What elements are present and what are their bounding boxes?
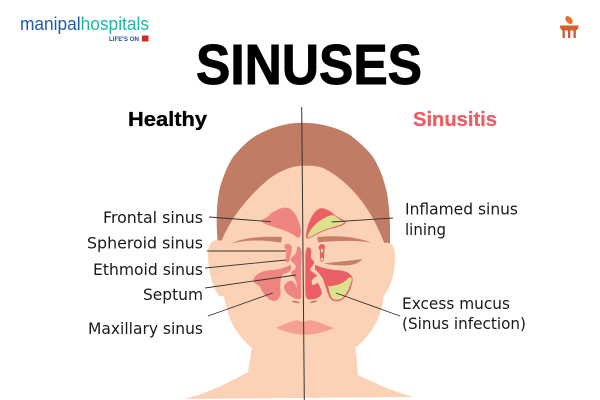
nostril right	[309, 301, 318, 303]
label: ethmoid sinus: Ethmoid sinus	[93, 260, 203, 279]
frontal mucus	[307, 215, 345, 238]
frontal sinusitis	[306, 208, 346, 238]
hair	[217, 123, 390, 246]
leader lines	[205, 217, 400, 316]
nostril left	[292, 301, 300, 303]
label: maxillary sinus: Maxillary sinus	[88, 319, 203, 338]
label: inflamed sinus lining: Inflamed sinus	[405, 200, 518, 218]
head illustration	[185, 123, 413, 399]
logo: Manipal Hospitals	[20, 14, 149, 43]
septum and turbinates healthy	[284, 247, 302, 299]
title: SINUSES	[196, 33, 422, 96]
label: excess mucus sinus infection: Excess mucus	[402, 294, 510, 313]
label: septum: Septum	[143, 285, 203, 304]
eyebrow left	[232, 237, 282, 243]
maxillary healthy	[253, 265, 291, 301]
divider line	[302, 107, 304, 400]
label: frontal sinus: Frontal sinus	[103, 208, 203, 227]
heading: sinusitis: Sinusitis	[413, 108, 497, 131]
maxillary sinusitis	[315, 265, 353, 301]
label: inflamed sinus lining	[405, 200, 518, 239]
small ethmoid healthy	[284, 244, 292, 262]
left ear	[208, 240, 228, 296]
right ear	[376, 243, 395, 297]
logo: Manipal Hospitals: LIFE'S ON	[109, 36, 139, 43]
label: excess mucus sinus infection	[402, 294, 526, 333]
heading: healthy: Healthy	[128, 108, 208, 131]
label: spheroid sinus: Spheroid sinus	[87, 234, 203, 252]
lips	[276, 320, 334, 335]
neck and shoulders	[185, 340, 413, 399]
maxillary mucus	[328, 277, 352, 300]
frontal sinus healthy	[261, 208, 301, 238]
logo: Manipal Hospitals: manipalhospitals	[20, 14, 149, 34]
label: inflamed sinus lining: lining	[405, 220, 446, 239]
septum and turbinates sinusitis	[305, 247, 322, 299]
eyebrow lowered right	[324, 259, 362, 265]
small ethmoid sinusitis	[319, 244, 325, 262]
icon: orange brand mark	[560, 15, 578, 38]
label: excess mucus sinus infection: (Sinus infection)	[402, 314, 526, 333]
face	[219, 166, 385, 366]
eyebrow right	[317, 236, 371, 243]
